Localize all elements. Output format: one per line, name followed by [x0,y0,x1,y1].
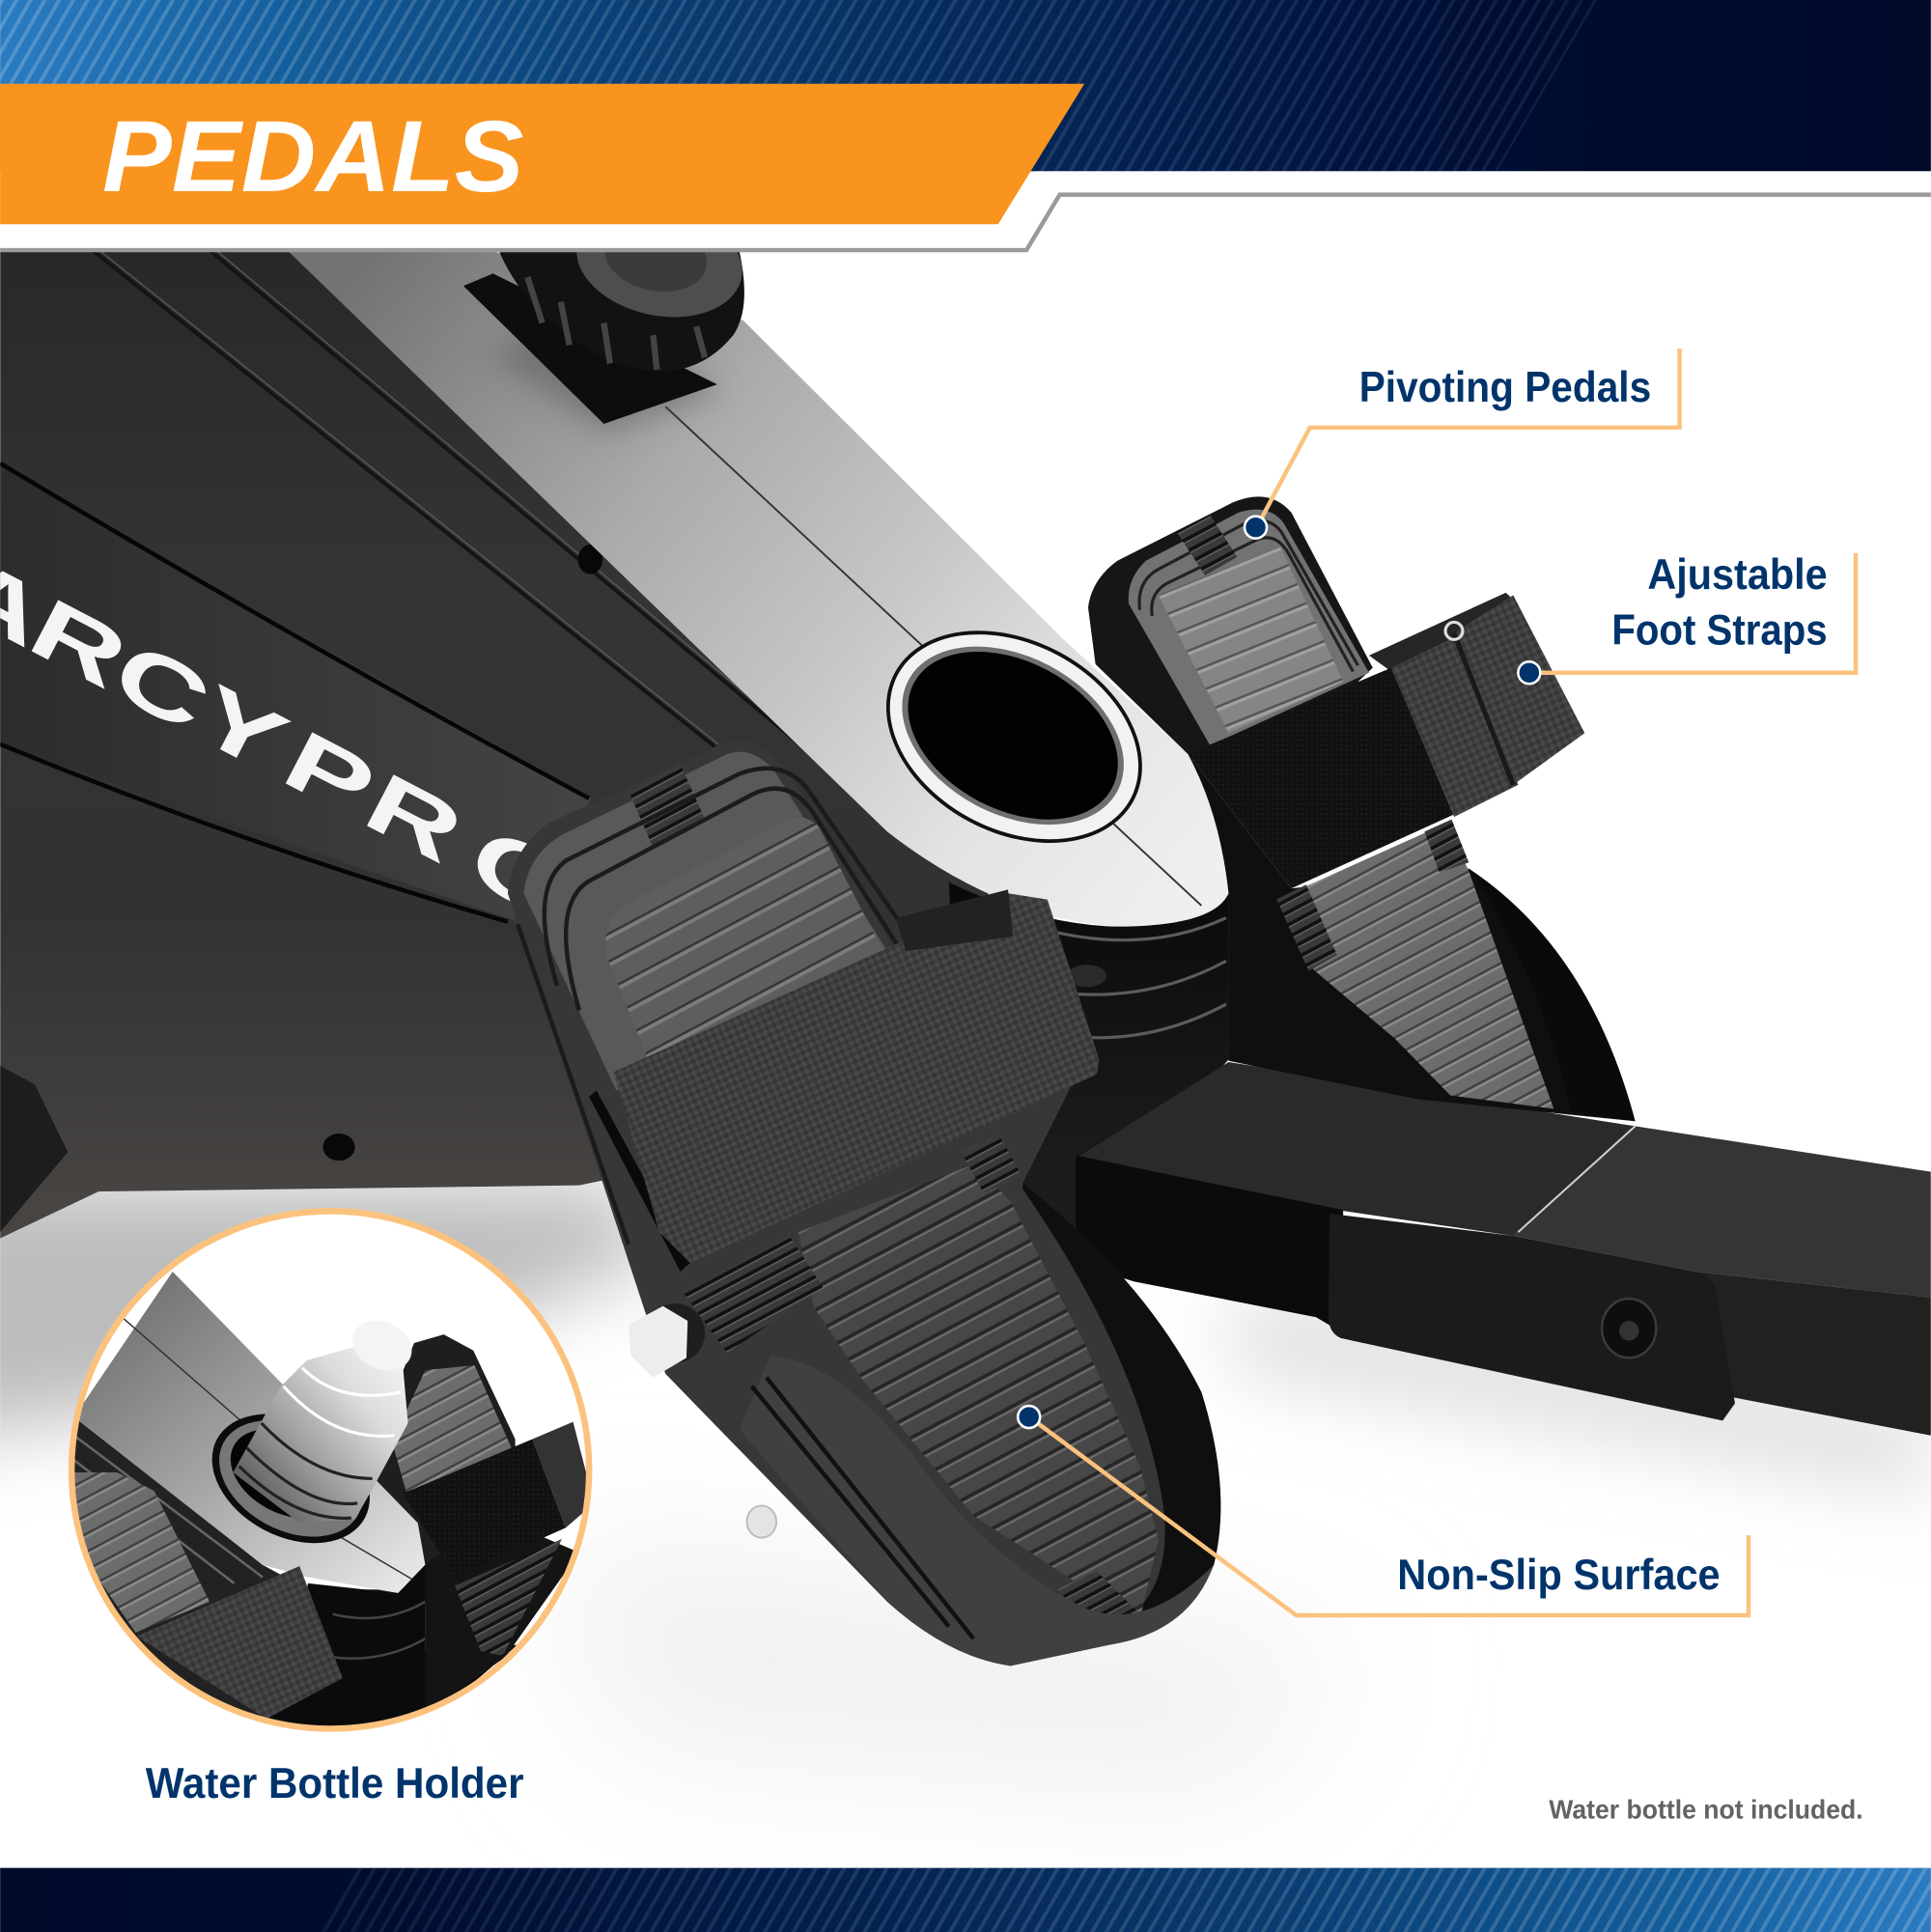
callout: foot straps: Foot Straps [1611,606,1828,654]
cylinder below arm [949,882,1228,1232]
callout: pivoting pedals: Pivoting Pedals [1359,364,1651,411]
floor shadows [0,1183,1931,1786]
inset caption: Water Bottle Holder [146,1760,524,1807]
callout: non-slip surface: Non-Slip Surface [1397,1552,1721,1599]
callout: pivoting pedals [1245,349,1680,539]
frame lines [0,249,874,922]
tension knob [463,252,744,438]
header band [0,0,1931,171]
callout: foot straps [1518,551,1856,684]
arm seam [665,406,1201,906]
machine frame body [0,251,1060,1239]
water bottle hole [886,630,1142,843]
hex bolt [629,1303,776,1538]
callout: non-slip surface [1018,1406,1749,1615]
inset: water bottle holder [71,1211,594,1728]
frame foot [0,1066,68,1232]
header grey rule [0,195,1931,250]
disclaimer note: Water bottle not included. [1549,1795,1863,1825]
title banner [0,84,1084,224]
front pedal [508,741,1220,1666]
rear pedal [1088,496,1636,1121]
crossbar tube [1076,1062,1931,1436]
logo band [0,465,592,922]
frame holes [322,545,602,1161]
title text: PEDALS [102,100,524,213]
white header cut [0,171,1931,250]
silver arm [289,251,1228,927]
callout: foot straps: Ajustable [1647,551,1828,599]
cylinder highlights [1048,918,1226,1038]
footer band [0,1868,1931,1932]
bracket hole [1067,965,1106,987]
